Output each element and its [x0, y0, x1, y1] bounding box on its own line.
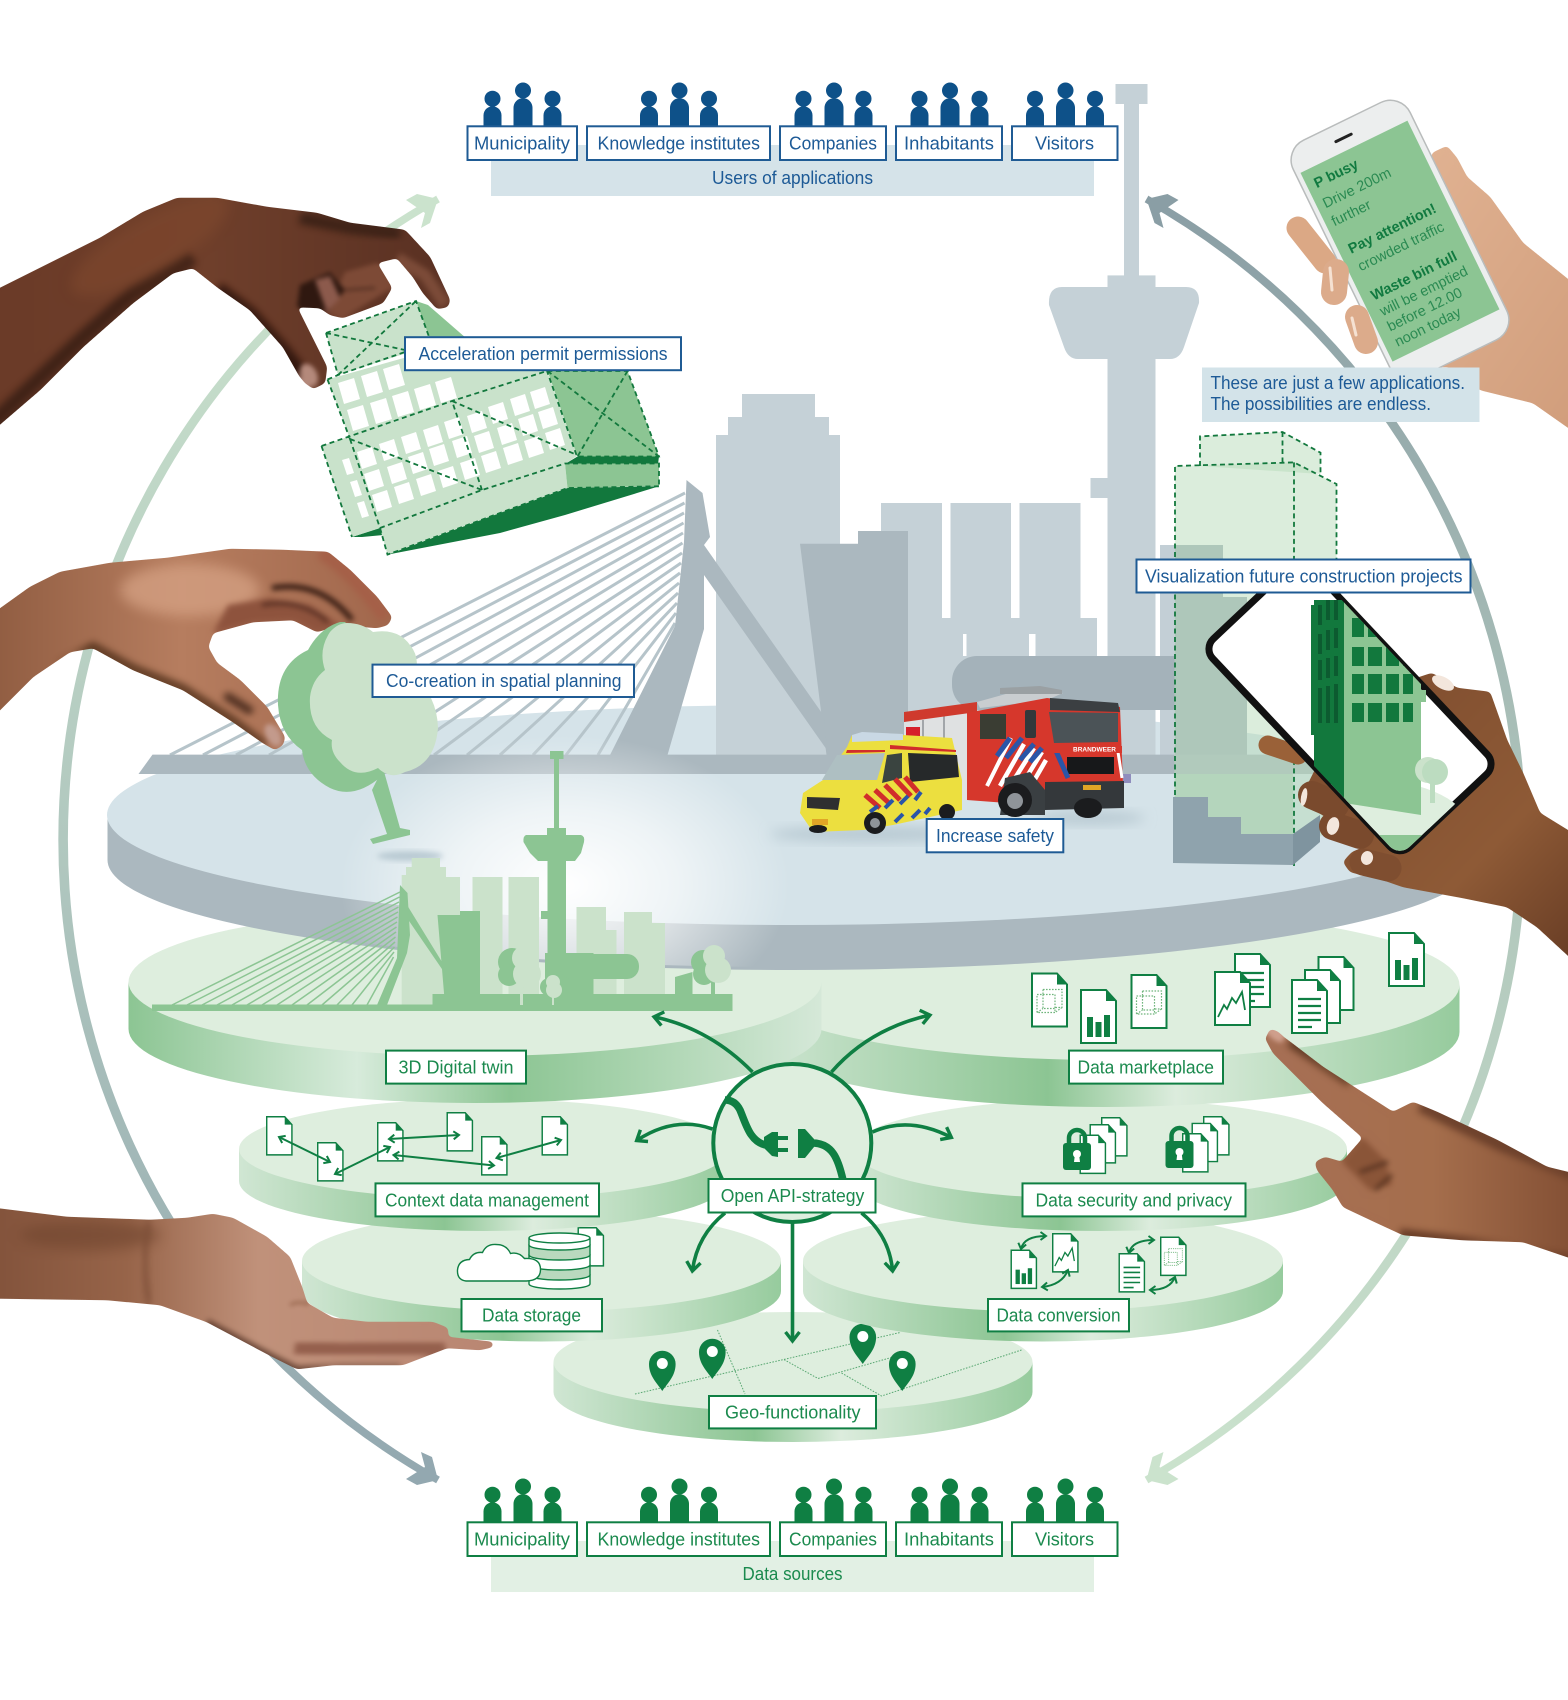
- label: Context data management: [376, 1183, 599, 1216]
- phone messages: noon today: [1392, 304, 1465, 350]
- label: Co-creation in spatial planning: [372, 665, 634, 697]
- mini dark building: [438, 911, 480, 1005]
- tall stepped building: [716, 394, 840, 755]
- phone messages: crowded traffic: [1356, 219, 1447, 275]
- label: Inhabitants: [896, 1522, 1002, 1556]
- label: Data marketplace: [1069, 1051, 1223, 1084]
- label: Visualization future construction projects: [1136, 560, 1470, 592]
- dark underside: [388, 486, 659, 555]
- label: Visualization future construction projects: Visualization future construction projects: [1145, 566, 1462, 586]
- label: Increase safety: Increase safety: [936, 826, 1054, 846]
- mini Euromast: [432, 751, 732, 1005]
- label: Knowledge institutes: [587, 1522, 770, 1556]
- icons: linked documents: [267, 1113, 567, 1181]
- label: Visitors: [1012, 126, 1118, 160]
- hand: lower-left open palm: [0, 1205, 493, 1369]
- illustration: future construction ghost building: [1173, 432, 1336, 866]
- panel: data sources: [468, 1478, 1118, 1592]
- note: applications: These are just a few applications.: [1210, 373, 1465, 393]
- label: Knowledge institutes: Knowledge institutes: [598, 133, 760, 153]
- dashed outlines: [322, 301, 659, 555]
- heading: Data sources: Data sources: [742, 1564, 842, 1584]
- bridge pylon: [610, 480, 710, 755]
- label: Open API-strategy: Open API-strategy: [721, 1186, 864, 1206]
- disc: geo-functionality: [554, 1312, 1032, 1442]
- walls: [328, 345, 577, 455]
- mini trees: [498, 945, 731, 1005]
- fire truck: BRANDWEER: [1073, 746, 1116, 754]
- label: Data storage: Data storage: [482, 1306, 581, 1326]
- disc: context data management: [239, 1099, 729, 1231]
- disc: data marketplace: [750, 910, 1460, 1107]
- icons: data marketplace documents: [1032, 933, 1424, 1043]
- label: Co-creation in spatial planning: Co-creation in spatial planning: [386, 671, 622, 691]
- plug and cable: [725, 1100, 843, 1180]
- label: Companies: Companies: [789, 133, 877, 153]
- phone frame and screen: [1203, 556, 1497, 857]
- label: Increase safety: [927, 819, 1063, 852]
- ambulance: [800, 732, 962, 834]
- three towers: [881, 503, 1080, 618]
- small phone: [1284, 93, 1516, 387]
- label: 3D Digital twin: [386, 1051, 526, 1084]
- bridge deck: [138, 755, 1330, 774]
- label: Inhabitants: Inhabitants: [904, 1529, 994, 1549]
- label: Data security and privacy: [1022, 1183, 1246, 1216]
- disc: city platform: [107, 705, 1478, 970]
- label: Municipality: [468, 126, 577, 160]
- label: Data conversion: Data conversion: [996, 1306, 1120, 1326]
- label: Data conversion: [988, 1299, 1129, 1331]
- icons: user groups: [484, 82, 1104, 126]
- windows: [338, 364, 565, 518]
- illustration: floating building: [322, 301, 659, 555]
- grey block behind ghost: [1160, 545, 1247, 755]
- label: Visitors: Visitors: [1035, 133, 1094, 153]
- text box: [1202, 368, 1480, 422]
- hand back: [1300, 673, 1568, 985]
- phone messages: Pay attention!: [1346, 201, 1439, 257]
- hand: top-left dark hand: [0, 198, 450, 425]
- icon: database: [529, 1233, 590, 1289]
- icon: cloud: [457, 1244, 540, 1281]
- icons: locks and documents: [1063, 1117, 1229, 1173]
- label: Companies: [780, 1522, 886, 1556]
- label: Companies: Companies: [789, 1529, 877, 1549]
- label: Knowledge institutes: [587, 126, 770, 160]
- hand: top-right holding phone: [1390, 146, 1568, 450]
- arrow: circular flow left: [62, 194, 438, 1485]
- disc: data security and privacy: [853, 1099, 1347, 1231]
- map lines: [635, 1330, 1022, 1396]
- phone messages: Drive 200m: [1320, 165, 1394, 212]
- icon: document behind database: [578, 1228, 603, 1266]
- label: Municipality: Municipality: [474, 1529, 570, 1549]
- icon: API plug circle: [713, 1064, 871, 1222]
- hand: mid-left reaching hand: [0, 549, 392, 750]
- icons: source groups: [484, 1478, 1104, 1522]
- label: Visitors: Visitors: [1035, 1529, 1094, 1549]
- label: Data marketplace: Data marketplace: [1078, 1058, 1214, 1078]
- label: Data security and privacy: Data security and privacy: [1036, 1190, 1232, 1210]
- label: Context data management: Context data management: [385, 1190, 589, 1210]
- hand: right pointing hand: [1265, 1027, 1568, 1268]
- disc: 3D digital twin: [128, 908, 822, 1103]
- mini cables: [172, 892, 400, 1005]
- label: 3D Digital twin: 3D Digital twin: [398, 1058, 514, 1078]
- heading: Users of applications: Users of applications: [712, 168, 873, 188]
- stairs base: [1173, 797, 1293, 865]
- phone messages: further: [1329, 197, 1374, 230]
- disc: data storage: [302, 1210, 781, 1342]
- note: applications: [1202, 93, 1568, 450]
- phone messages: Waste bin full: [1369, 249, 1460, 304]
- dark building: [800, 531, 908, 755]
- nails: [1299, 672, 1456, 866]
- spotlight glow: [360, 750, 762, 966]
- arrows: API to platforms: [638, 1015, 950, 1340]
- top roof and side: [416, 301, 505, 397]
- label: Geo-functionality: Geo-functionality: [725, 1402, 860, 1422]
- arrow: circular flow right: [1146, 194, 1522, 1485]
- fire truck: [904, 686, 1131, 818]
- shadow under tree: [377, 851, 443, 861]
- phone messages: P busy: [1312, 157, 1361, 192]
- mini deck: [152, 1004, 732, 1011]
- hand and phone: future construction: [1205, 594, 1568, 956]
- label: Open API-strategy: [708, 1179, 876, 1212]
- icons: conversion documents: [1011, 1234, 1186, 1292]
- phone messages: will be emptied: [1377, 263, 1471, 320]
- illustration: Rotterdam skyline: [138, 84, 1330, 774]
- label: Geo-functionality: [709, 1396, 876, 1428]
- icon: large tree: [278, 622, 438, 844]
- bridge cables: [170, 493, 685, 755]
- illustration: mini digital twin city: [152, 751, 732, 1011]
- right volumes: [548, 371, 659, 456]
- label: Inhabitants: [896, 126, 1002, 160]
- mini light buildings: [402, 858, 665, 1005]
- disc: data conversion: [803, 1210, 1283, 1342]
- note: applications: The possibilities are endless.: [1210, 394, 1431, 414]
- label: Inhabitants: Inhabitants: [904, 133, 994, 153]
- phone messages: [1311, 134, 1486, 352]
- label: Municipality: [468, 1522, 577, 1556]
- background pill: [952, 656, 1197, 710]
- illustration: emergency vehicles: [770, 686, 1145, 852]
- label: Municipality: Municipality: [474, 133, 570, 153]
- label: Data storage: [462, 1299, 602, 1331]
- phone messages: before 12.00: [1385, 285, 1465, 335]
- label: Acceleration permit permissions: Acceleration permit permissions: [418, 344, 668, 364]
- label: Companies: [780, 126, 886, 160]
- building on screen: [1311, 600, 1456, 851]
- label: Knowledge institutes: Knowledge institutes: [598, 1529, 760, 1549]
- label: Acceleration permit permissions: [405, 337, 681, 370]
- label: Visitors: [1012, 1522, 1118, 1556]
- panel: users of applications: [468, 82, 1118, 196]
- fingers: [1268, 745, 1388, 868]
- icons: map pins: [649, 1324, 916, 1391]
- fingers over phone: [1298, 228, 1366, 342]
- Euromast tower: [1049, 84, 1199, 755]
- mini pylon: [377, 885, 410, 1005]
